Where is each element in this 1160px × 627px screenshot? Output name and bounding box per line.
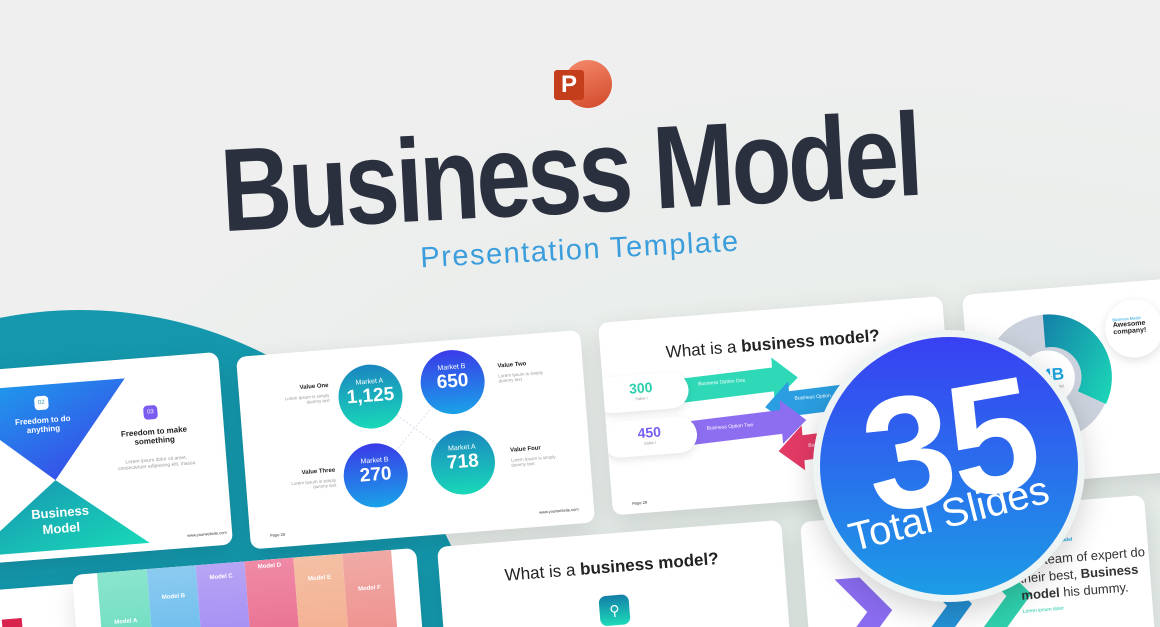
slide 3: arrows: Business Option One [698,378,745,387]
slide 6: model columns: Model F [358,585,381,593]
slide 2: market circles: Market B [360,456,389,466]
slide 2: market circles: Value Four [510,445,541,454]
slide 4: cycle ring: Awesome company! [1113,320,1147,336]
icon: powerpoint logo [554,60,612,108]
slide 2: market circles: Lorem Ipsum is simply dummy text [511,454,556,468]
slide 2: market circles: Market A [355,378,383,387]
icon: powerpoint logo: P [561,71,577,98]
slide 2: market circles: Value Two [497,361,527,369]
slide 2: market circles: Market B [437,363,466,372]
slide 2: market circles: Value Three [301,468,335,476]
slide 7: what is a business model [437,520,796,627]
slide 1: hourglass: Lorem ipsum dolor sit amet, consectetuer adipiscing elit, massa [118,455,196,472]
slide 4: cycle ring [962,278,1160,487]
slide 3: arrows: Business Option [794,393,831,402]
slide 2: market circles: Page 28 [270,532,285,538]
slide 5: partial [0,578,164,627]
slide 4: cycle ring: Business Model [1112,315,1141,322]
slide 2: market circles: 270 [359,463,392,487]
slide 2: market circles: Lorem Ipsum is simply dummy text [498,370,543,383]
slide 6: model columns: Model C [209,573,233,581]
slide 2: market circles: 1,125 [346,384,395,408]
badge: 35 total slides: Total Slides [844,468,1053,560]
slide 2: market circles: Lorem Ipsum is simply dummy text [291,478,337,489]
slide 3: arrows: 300 [628,379,653,397]
slide 3: arrows: Business Option Two [706,422,754,432]
slide 8: chevrons text [800,495,1159,627]
slide 1: hourglass: www.yourwebsite.com [187,530,227,538]
slide 2: market circles: 650 [436,370,469,393]
slide 7: what is a business model: What is a business model? [504,549,719,585]
slide 7: what is a business model: ⚲ [609,602,620,619]
slide 3: arrows: What is a business model? [665,326,880,362]
slide 3: arrows: Sales I [635,395,648,401]
slide 1: hourglass: Freedom to do anything [15,414,71,435]
subtitle: Presentation Template [420,226,740,274]
slide 2: market circles: Value One [299,383,329,391]
slide 1: hourglass: 02 [38,400,45,406]
slide 3: arrows: Sales I [644,440,656,446]
slide 1: hourglass: Business Model [31,503,89,537]
badge: 35 total slides [813,330,1085,602]
background teal arc [0,310,490,627]
slide 1: hourglass [0,352,233,571]
slide 6: model columns: Model A [114,618,138,626]
slide 2: market circles [236,330,595,549]
slide 3: arrows [598,296,957,515]
slide 1: hourglass: Freedom to make something [121,425,187,447]
slide 3: arrows: 450 [637,423,661,441]
slide 3: arrows: Page 29 [632,500,647,506]
slide 8: chevrons text: Business Model [1034,537,1073,546]
slide 2: market circles: Market A [448,443,476,453]
slide 8: chevrons text: Lorem ipsum dolor [1022,606,1064,615]
slide 8: chevrons text: Our team of expert do their best, Business model his dummy. [1018,544,1145,603]
slide 6: model columns [72,548,431,627]
slide 2: market circles: Lorem Ipsum is simply dummy text [284,393,330,405]
slide 6: model columns: Model B [162,593,185,601]
slide 6: model columns: Model E [308,575,331,582]
slide 2: market circles: www.yourwebsite.com [539,507,579,515]
slide 1: hourglass: 03 [147,409,154,416]
title: Business Model [217,89,923,257]
slide 3: arrows: Business [808,441,829,449]
slide 4: cycle ring: 34B [1032,364,1065,386]
slide 2: market circles: 718 [446,450,480,474]
slide 4: cycle ring: Business Model [1035,383,1064,391]
badge: 35 total slides: 35 [850,342,1048,547]
slide 6: model columns: Model D [258,563,281,570]
